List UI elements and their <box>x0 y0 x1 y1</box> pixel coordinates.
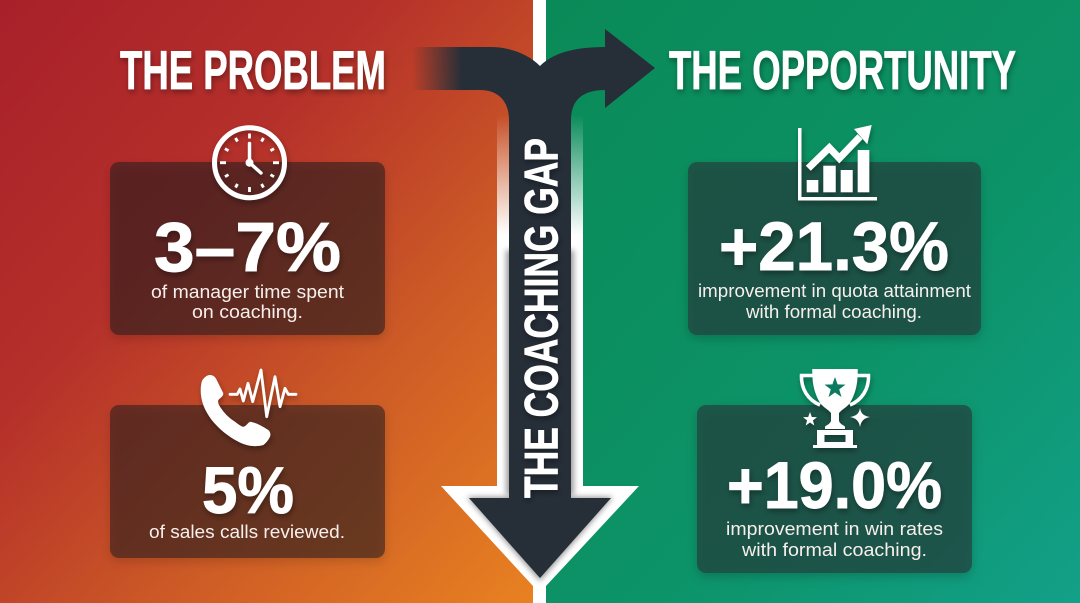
panel: sales calls card <box>110 370 385 558</box>
card background <box>110 162 385 335</box>
left tail <box>412 47 462 90</box>
arrow: the coaching gap <box>412 29 655 586</box>
caption line 2: with formal coaching. <box>745 301 922 322</box>
caption: manager time: of manager time spent <box>151 281 344 302</box>
arrow white outline <box>441 235 639 586</box>
icon: trophy <box>801 369 870 448</box>
divider <box>533 0 546 80</box>
panel: opportunity background <box>540 0 1080 603</box>
dark branching arrow <box>462 29 655 578</box>
stem shadow <box>506 250 574 495</box>
caption: sales calls: of sales calls reviewed. <box>149 521 345 542</box>
arrow head shadow <box>467 497 613 581</box>
card background <box>688 162 981 335</box>
card background <box>110 405 385 558</box>
panel: quota attainment card <box>688 125 981 335</box>
icon: clock <box>214 128 284 198</box>
icon: phone with waveform <box>201 370 296 446</box>
heading: the problem: THE PROBLEM <box>120 39 386 101</box>
bottom divider <box>533 570 546 603</box>
caption: quota attainment: improvement in quota attainment <box>698 280 971 301</box>
stat: 3-7%: 3–7% <box>154 208 341 286</box>
panel: win rates card <box>697 369 972 573</box>
panel: manager time card <box>110 128 385 335</box>
stat: 5%: 5% <box>202 453 294 527</box>
card background <box>697 405 972 573</box>
caption line 2: with formal coaching. <box>741 539 927 560</box>
icon: growth chart <box>798 125 877 200</box>
panel: problem background <box>0 0 540 603</box>
stat: +19.0%: +19.0% <box>727 448 942 522</box>
stat: +21.3%: +21.3% <box>719 208 949 285</box>
caption: win rates: improvement in win rates <box>726 518 943 539</box>
caption line 2: on coaching. <box>192 301 303 322</box>
arrow label: THE COACHING GAP <box>514 138 568 498</box>
arrow stem fading white <box>497 115 583 235</box>
